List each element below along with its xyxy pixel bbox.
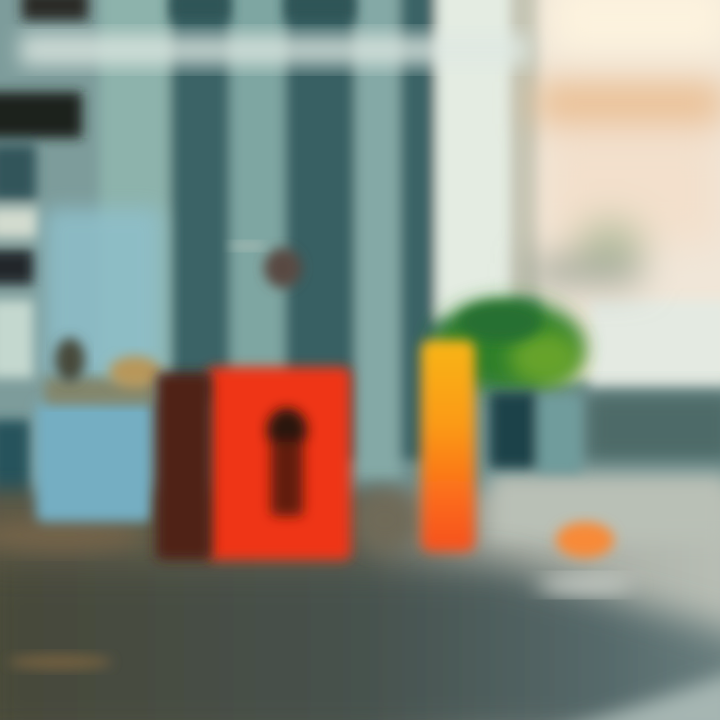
right background: dark sill band — [585, 392, 720, 462]
shelves: dark left bands — [0, 92, 82, 510]
plant pot — [490, 392, 581, 472]
table surface — [0, 474, 720, 720]
red box with keyhole — [156, 367, 351, 560]
window: warm glow and frame — [530, 0, 720, 284]
plant: green foliage — [432, 299, 584, 391]
bottle: pale blue glass — [36, 208, 162, 522]
orange gradient tube — [421, 340, 475, 552]
small orange capsule — [537, 522, 633, 594]
curtain rail: white horizontal bar — [20, 34, 530, 66]
keyhole — [267, 408, 307, 516]
box dark side — [156, 372, 212, 560]
small dark knob above box — [232, 242, 302, 288]
box front — [207, 367, 351, 560]
top dark strip — [22, 0, 355, 20]
